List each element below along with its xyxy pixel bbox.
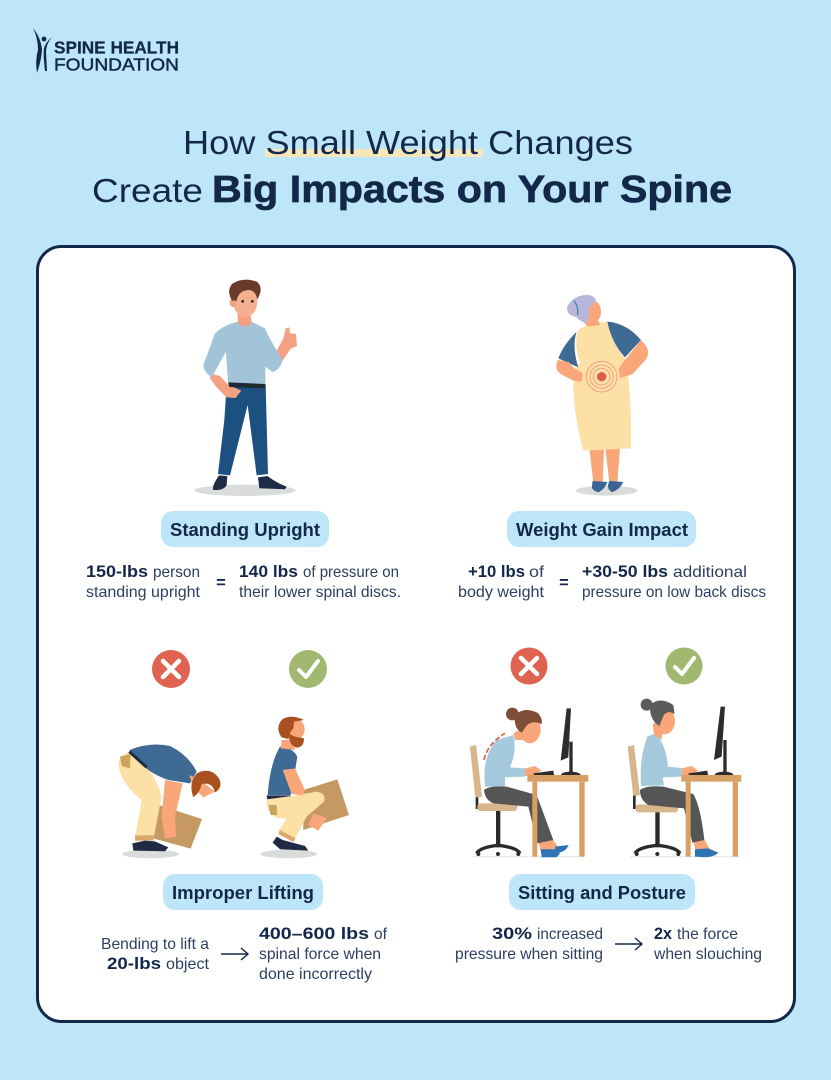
text: standing upright formula: person — [153, 564, 200, 581]
text: improper lifting formula: 400–600 lbs — [259, 925, 369, 943]
text: standing upright formula: standing upright — [86, 584, 201, 601]
title: Big Impacts on Your Spine — [212, 169, 732, 211]
heading: Sitting and Posture — [509, 874, 695, 910]
illustration: older woman with back pain — [556, 295, 648, 496]
text: standing upright formula: = — [216, 574, 226, 592]
icon: green check, proper lifting — [289, 650, 327, 688]
logo: Spine Health Foundation — [33, 28, 179, 74]
icon: green check, good posture — [666, 648, 702, 684]
illustration: slouching at desk — [470, 708, 588, 857]
text: sitting formula: the force — [677, 926, 738, 943]
logo: Spine Health Foundation: SPINE HEALTH — [54, 38, 179, 58]
illustration: man lifting with squat — [260, 717, 349, 858]
heading: Weight Gain Impact — [507, 511, 696, 547]
text: standing upright formula — [86, 563, 401, 601]
main white panel — [38, 246, 794, 1022]
title — [92, 124, 732, 211]
text: sitting formula: when slouching — [653, 946, 762, 963]
heading: Standing Upright: Standing Upright — [170, 519, 320, 540]
heading: Improper Lifting: Improper Lifting — [172, 882, 314, 903]
text: improper lifting formula — [101, 925, 388, 983]
text: improper lifting formula: done incorrectly — [259, 966, 372, 983]
text: improper lifting formula: object — [166, 956, 210, 973]
text: standing upright formula: of pressure on — [303, 564, 399, 581]
text: standing upright formula: 150-lbs — [86, 563, 148, 581]
text: standing upright formula: their lower spinal discs. — [239, 584, 401, 601]
text: sitting formula: 2x — [654, 925, 673, 943]
text: weight gain formula: additional — [673, 564, 747, 581]
heading: Sitting and Posture: Sitting and Posture — [518, 882, 686, 903]
title: How Small Weight Changes — [183, 124, 633, 161]
text: improper lifting formula: spinal force when — [259, 946, 381, 963]
icon: red cross, improper lifting — [152, 650, 190, 688]
illustration: man lifting with bent back — [118, 745, 221, 858]
text: sitting formula: 30% — [492, 925, 532, 943]
text: sitting formula: increased — [537, 926, 603, 943]
text: weight gain formula: of — [529, 564, 545, 581]
text: weight gain formula: +10 lbs — [468, 563, 525, 581]
text: sitting formula — [455, 925, 762, 963]
text: weight gain formula: +30-50 lbs — [582, 563, 668, 581]
text: weight gain formula: body weight — [458, 584, 545, 601]
text: improper lifting formula: 20-lbs — [107, 955, 161, 973]
icon: red cross, slouching — [510, 648, 548, 684]
heading: Standing Upright — [161, 511, 329, 547]
text: weight gain formula: = — [559, 574, 569, 592]
title: Create — [92, 172, 203, 209]
text: weight gain formula: pressure on low back discs — [582, 584, 766, 601]
heading: Weight Gain Impact: Weight Gain Impact — [516, 519, 688, 540]
text: improper lifting formula: Bending to lift a — [101, 936, 209, 953]
text: weight gain formula — [458, 563, 766, 601]
text: standing upright formula: 140 lbs — [239, 563, 298, 581]
illustration: upright posture at desk — [628, 699, 741, 857]
text: sitting formula: pressure when sitting — [455, 946, 603, 963]
heading: Improper Lifting — [163, 874, 323, 910]
logo: Spine Health Foundation: FOUNDATION — [54, 54, 179, 74]
illustration: standing man with thumbs up — [194, 280, 297, 496]
text: improper lifting formula: of — [374, 926, 388, 943]
